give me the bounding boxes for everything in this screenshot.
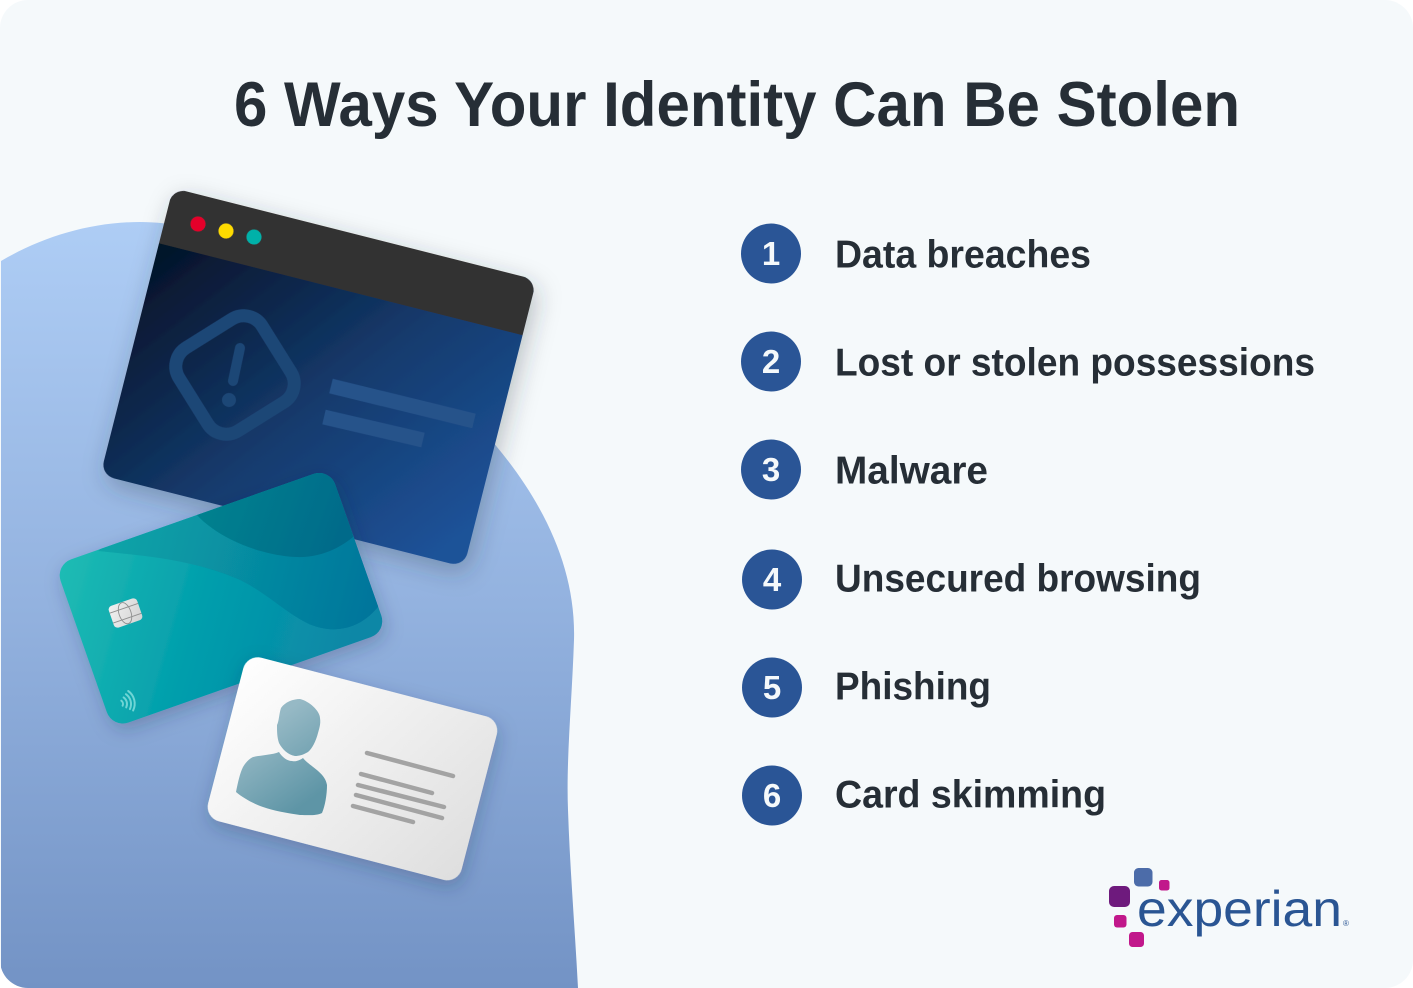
list item 4 (742, 550, 1201, 610)
illustration: browser window with warning (100, 188, 537, 567)
person silhouette (236, 699, 327, 815)
logo wordmark: experian (1137, 881, 1342, 937)
list item 3: 3 (762, 451, 780, 488)
logo squares (1109, 868, 1170, 947)
contactless symbol (121, 691, 135, 710)
list item 6 (742, 766, 1106, 826)
title: 6 Ways Your Identity Can Be Stolen (234, 70, 1240, 140)
illustration: credit card (56, 473, 392, 736)
list item 1: Data breaches (835, 234, 1091, 276)
list item 5: 5 (763, 669, 781, 706)
list item 3: Malware (835, 450, 988, 492)
list item 4: 4 (763, 561, 782, 598)
list item 2 (741, 332, 1315, 392)
Experian logo: ® (1343, 919, 1349, 928)
list item 5: Phishing (835, 666, 991, 708)
placeholder text bars (324, 386, 474, 440)
illustration: ID card (204, 654, 501, 884)
browser title bar (159, 188, 537, 335)
list item 5 (742, 658, 991, 718)
list item 6: 6 (763, 777, 781, 814)
list item 1: 1 (762, 235, 780, 272)
list item 2: Lost or stolen possessions (835, 342, 1315, 384)
background blob (1, 222, 578, 988)
list item 3 (741, 440, 988, 500)
list item 1 (741, 224, 1091, 284)
list item 4: Unsecured browsing (835, 558, 1201, 600)
ID text lines (353, 753, 453, 822)
card waves (98, 473, 378, 630)
window control dots (190, 216, 262, 244)
list item 2: 2 (762, 343, 780, 380)
card chip (108, 597, 143, 629)
Experian logo (1109, 868, 1349, 947)
list item 6: Card skimming (835, 774, 1106, 816)
warning icon (167, 307, 303, 443)
